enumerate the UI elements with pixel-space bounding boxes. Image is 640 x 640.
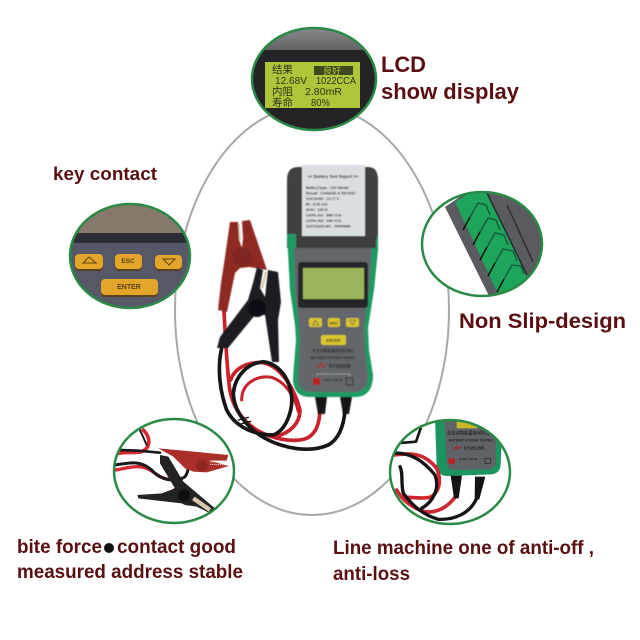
circle: LCD detail: 12.68V	[275, 76, 307, 87]
heading: LCD show display: LCD	[381, 52, 426, 77]
circle: LCD detail	[250, 26, 380, 132]
printed paper report: Result : CHARGE & RETEST	[306, 192, 357, 196]
heading: LCD show display	[381, 52, 520, 104]
caption: bite force contact good measured address stable: contact good	[117, 536, 236, 558]
circle: LCD detail: 结果	[272, 63, 293, 76]
circle: cable connection detail: 8-30V CAT III	[459, 457, 478, 461]
large grey ellipse outline	[175, 105, 449, 515]
caption: line machine one of anti-off, anti-loss	[333, 537, 594, 585]
circle: LCD detail: 1022CCA	[316, 76, 356, 87]
caption: line machine one of anti-off, anti-loss: anti-loss	[333, 563, 410, 585]
circle: LCD detail: 寿命	[272, 96, 293, 109]
caption: bite force contact good measured address stable: bite force	[17, 536, 102, 558]
device labels: DY2015B	[329, 364, 351, 370]
grey front panel	[294, 248, 372, 392]
heading: LCD show display: show display	[381, 79, 520, 104]
battery symbol	[313, 374, 353, 385]
down button	[346, 318, 359, 327]
circle: cable connection detail: DY2015B	[464, 445, 485, 450]
black clamp	[217, 267, 281, 362]
circle: non-slip grip detail	[420, 190, 545, 298]
caption: bite force contact good measured address stable: measured address stable	[17, 561, 243, 583]
caption: line machine one of anti-off, anti-loss: Line machine one of anti-off ,	[333, 537, 594, 559]
label: key contact: key contact	[53, 163, 157, 184]
esc button	[328, 318, 340, 327]
up button	[309, 318, 322, 327]
circle: LCD detail: 内阻	[272, 85, 293, 98]
circle: LCD detail: 80%	[311, 98, 330, 109]
printed paper report: IR : 6.29 mΩ	[306, 202, 327, 206]
enter button: ENTER	[326, 338, 341, 343]
printer housing	[287, 167, 378, 248]
enter button	[321, 335, 346, 345]
battery tester device	[287, 165, 378, 414]
circle: LCD detail: 良好	[323, 65, 341, 76]
circle: keypad detail	[68, 202, 192, 310]
green body	[287, 234, 378, 397]
circle: keypad detail: ESC	[121, 258, 135, 265]
printer lower shadow	[296, 236, 376, 248]
device labels: 全自动智能蓄电池检测仪	[312, 348, 354, 353]
circle: clamps detail	[112, 417, 236, 525]
LCD bezel	[298, 262, 368, 308]
device labels: BATTERY SYSTEM TESTER	[311, 356, 356, 360]
printed paper report: << Battery Test Report >>	[308, 174, 359, 179]
printed paper report: DATE/SER.NO : 00000000	[306, 224, 351, 228]
device labels	[311, 348, 356, 370]
caption: bite force contact good measured address stable	[17, 536, 243, 583]
printed paper report: SOH : 100 %	[306, 208, 328, 212]
circle: LCD detail: 2.80mR	[305, 87, 342, 98]
cable connectors	[315, 397, 352, 414]
circle: cable connection detail: BATTERY SYSTEM TESTER	[449, 439, 493, 443]
cables of the tester	[219, 312, 345, 449]
circle: cable connection detail: 全自动智能蓄电池检测仪	[447, 430, 495, 437]
printed paper report: VOLTAGE : 12.77 V	[306, 197, 340, 201]
circle: cable connection detail	[388, 417, 512, 526]
printed paper report: CAPA.Std : 440 CCA	[306, 219, 342, 223]
printed paper report: BatteryType : 12V Model	[306, 186, 349, 190]
circle: keypad detail: ENTER	[117, 284, 141, 291]
printed paper report	[302, 165, 365, 236]
red clamp	[218, 220, 267, 312]
battery symbol: 8-30V CAT III	[324, 378, 342, 382]
label: non slip design: Non Slip-design	[459, 310, 626, 333]
LCD screen	[303, 268, 364, 299]
printed paper report: CAPA.Act : 899 CCA	[306, 214, 342, 218]
esc button: ESC	[330, 320, 338, 326]
